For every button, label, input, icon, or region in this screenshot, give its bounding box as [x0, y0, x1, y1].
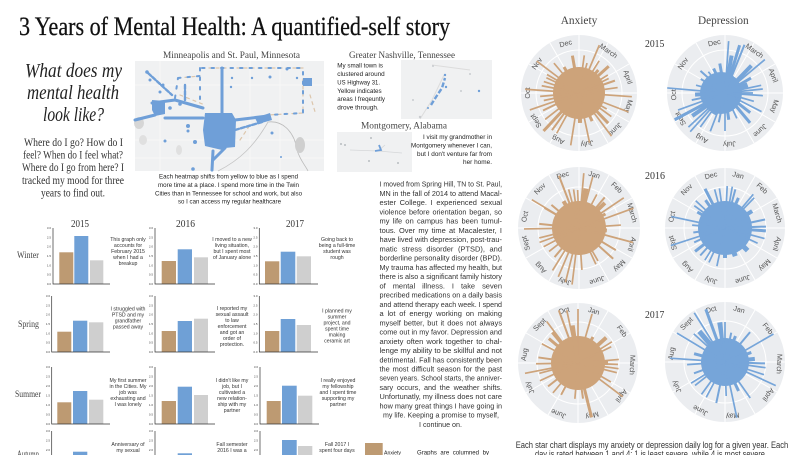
note: Summer 2017 [320, 378, 357, 408]
bar chart: Spring 2017: 3.0 [253, 294, 258, 298]
star chart: Anxiety 2016: June [588, 274, 606, 287]
bar chart: Summer 2015: 0.5 [46, 412, 50, 416]
star chart: Depression 2017: Feb [761, 321, 775, 336]
bar chart: Summer 2015 [46, 365, 110, 426]
star chart: Depression 2016: June [734, 273, 752, 286]
note: Winter 2015: This graph only [110, 237, 146, 243]
star chart: Depression 2016: Jan [731, 169, 745, 181]
personal story paragraph: ester College. I experienced sexual [380, 198, 502, 207]
bar chart: Autumn 2016: 2.0 [149, 448, 153, 452]
bar chart: Winter 2015: 2.0 [47, 245, 51, 249]
bar chart: Autumn 2016: 3.0 [149, 429, 153, 433]
heatmap caption: so I can access my regular healthcare [178, 198, 281, 206]
bar chart: Summer 2015: 0.0 [46, 422, 50, 426]
Nashville note: Yellow indicates [337, 88, 382, 95]
star chart: Depression 2016: April [771, 236, 784, 253]
star chart: Depression 2017: Jan [732, 304, 746, 315]
star chart: Depression 2017: Aug [666, 346, 677, 360]
note: Winter 2017: student was [323, 249, 351, 255]
bar chart: Spring 2016: 3.0 [149, 294, 153, 298]
star chart: Anxiety 2016: April [626, 236, 638, 253]
bar chart: Winter 2015: 0.5 [47, 273, 51, 277]
personal story paragraph: have lived with depression, post-trau- [380, 235, 502, 244]
bar chart: Winter 2017: 0.5 [253, 273, 258, 277]
star chart: Depression 2016: May [757, 257, 773, 273]
year headers for bar charts: 2015 [71, 219, 89, 230]
bar chart: Autumn 2016: 2.5 [149, 438, 153, 442]
star chart: Depression 2015: May [769, 99, 781, 114]
star chart: Depression 2017: April [760, 386, 776, 404]
bar chart: Winter 2015: 1.0 [47, 263, 51, 267]
heading: What does my mental health look like: What does my [25, 61, 122, 82]
bar chart: Summer 2016: 2.0 [149, 384, 153, 388]
star chart: Depression 2017: March [775, 354, 784, 374]
intro text: tracked my mood for three [22, 175, 124, 187]
bar chart: Spring 2017 [253, 294, 318, 354]
star chart: Anxiety 2016: Aug [533, 260, 548, 276]
star chart: Anxiety 2016: Dec [555, 169, 571, 181]
star chart column headings: Anxiety [561, 15, 598, 27]
Nashville note [337, 62, 386, 112]
Nashville note: My small town is [337, 62, 384, 70]
bar chart: Winter 2016 [149, 226, 215, 286]
bar chart: Autumn 2015 [46, 429, 87, 455]
Montgomery note: but I don't venture far from [417, 151, 492, 158]
Montgomery note: I visit my grandmother in [423, 134, 492, 141]
bar chart: Autumn 2017: 2.5 [254, 438, 258, 442]
personal story paragraph: I moved from Spring Hill, TN to St. Paul, [380, 180, 502, 189]
bar chart: Winter 2015: 2.5 [47, 235, 51, 239]
note: Spring 2015: passed away [113, 324, 144, 330]
star chart: Anxiety 2016: Sept [519, 235, 532, 252]
Nashville note: US Highway 31. [337, 80, 380, 86]
star chart: Depression 2017 [665, 302, 785, 422]
heading: What does my mental health look like [25, 61, 122, 126]
note: Winter 2017: Going back to [321, 237, 353, 243]
bar chart: Winter 2015: 3.0 [47, 226, 51, 230]
star chart explanation [516, 440, 788, 455]
year headers for bar charts: 2016 [176, 219, 195, 230]
note: Winter 2015: when I had a [113, 255, 143, 261]
star chart: Depression 2016: March [770, 202, 784, 224]
personal story paragraph: matic stress disorder (PTSD), and [380, 244, 502, 253]
note: Winter 2016: of January alone [213, 255, 251, 261]
bar chart: Autumn 2017: 3.0 [254, 429, 258, 433]
note: Spring 2017: making [329, 332, 345, 338]
personal story paragraph: there is also a significant family history [380, 272, 502, 281]
bar chart: Summer 2017: 1.0 [254, 403, 258, 407]
Montgomery note: Montgomery whenever I can, [411, 142, 492, 150]
star chart: Depression 2015: April [767, 67, 780, 84]
star chart year labels: 2016 [645, 171, 665, 182]
note: Spring 2016 [216, 306, 249, 348]
note: Autumn 2016: 2016 I was a [217, 448, 247, 454]
bar chart: Spring 2015: 3.0 [46, 294, 50, 298]
year headers for bar charts: 2017 [286, 219, 304, 230]
star chart: Anxiety 2016: March [625, 202, 639, 224]
star chart column headings [561, 15, 749, 27]
bar chart: Winter 2017: 2.5 [253, 235, 258, 239]
note: Spring 2016: order of [223, 336, 241, 342]
bar chart: Summer 2016: 3.0 [149, 365, 153, 369]
note: Winter 2017: being a full-time [319, 243, 355, 249]
bar chart: Autumn 2016 [149, 429, 192, 455]
note: Spring 2016: I reported my [217, 306, 248, 312]
map heading: Nashville: Greater Nashville, Tennessee [349, 50, 456, 61]
star chart: Anxiety 2017: July [522, 380, 536, 395]
note: Summer 2015: job was [118, 390, 137, 396]
star chart: Depression 2016: July [703, 275, 718, 287]
star chart: Anxiety 2015: July [580, 138, 594, 149]
note: Autumn 2015 [111, 442, 145, 454]
intro text: Where do I go from here? I [22, 162, 124, 174]
note: Winter 2015 [110, 237, 146, 267]
note: Spring 2015 [111, 306, 146, 330]
personal story paragraph: detrimental. Fall has consistently been [380, 355, 502, 364]
note: Winter 2016: but I spent most [214, 249, 251, 255]
note: Spring 2016: protection. [220, 342, 244, 348]
star chart: Depression 2015: Nov [675, 55, 690, 71]
heatmap: Greater Nashville [401, 60, 492, 119]
bar chart: Spring 2015 [46, 294, 110, 354]
bar chart: Winter 2016: 0.0 [149, 282, 153, 286]
note: Winter 2016: I moved to a new [212, 237, 252, 243]
personal story paragraph: myself better, but it does not always [380, 318, 502, 327]
heading: What does my mental health look like: look like? [43, 105, 104, 126]
bar chart: Spring 2015: 0.5 [46, 341, 50, 345]
bar chart: Winter 2016: 1.5 [149, 254, 153, 258]
note: Summer 2015: My first summer [110, 378, 147, 384]
note: Winter 2015: breakup [119, 261, 137, 267]
star chart: Anxiety 2017: May [584, 410, 600, 422]
personal story paragraph: borderline personality disorder (BPD). [380, 254, 502, 263]
star chart year labels: 2015 [645, 39, 664, 50]
bar chart: Summer 2015: 1.0 [46, 403, 50, 407]
bar chart: Winter 2016: 1.0 [149, 263, 153, 267]
note: Summer 2016: I didn't like my [216, 378, 249, 384]
bar chart: Winter 2016: 2.5 [149, 235, 153, 239]
personal story paragraph: my life. Keeping a promise to myself, [383, 411, 499, 420]
note: Summer 2015 [110, 378, 147, 408]
star chart: Anxiety 2015: Nov [529, 55, 544, 71]
star chart: Anxiety 2015: April [621, 69, 635, 86]
bar chart: Winter 2015: 0.0 [47, 282, 51, 286]
note: Winter 2016 [212, 237, 252, 261]
map heading: Minneapolis: Minneapolis and St. Paul, Minnesota [163, 50, 301, 61]
star chart: Depression 2015: Aug [694, 132, 709, 146]
note: Autumn 2017: spent four days [319, 448, 355, 454]
note: Spring 2017: spent time [325, 326, 349, 332]
star chart: Anxiety 2015: Dec [558, 37, 573, 49]
bar chart: Summer 2015: 1.5 [46, 394, 50, 398]
bar chart: Spring 2016: 1.0 [149, 331, 153, 335]
heatmap caption: Each heatmap shifts from yellow to blue as I spend [159, 174, 298, 180]
note: Summer 2016: new relation- [217, 396, 247, 402]
star chart: Anxiety 2015: Oct [523, 87, 532, 99]
bar chart: Summer 2017: 0.0 [254, 422, 258, 426]
bar chart: Summer 2015: 2.5 [46, 374, 50, 378]
bar chart: Spring 2017: 1.5 [253, 322, 258, 326]
bar chart: Summer 2016: 1.0 [149, 403, 153, 407]
season labels: Summer [15, 389, 41, 399]
star chart: Anxiety 2016: Nov [532, 181, 548, 196]
bar chart: Winter 2017: 3.0 [253, 226, 258, 230]
note: Autumn 2015: Anniversary of [111, 442, 145, 448]
note: Summer 2017: supporting my [322, 396, 355, 402]
bar chart: Spring 2016: 0.0 [149, 350, 153, 354]
star chart: Depression 2015: Dec [707, 37, 722, 48]
heatmap caption: more time at a place. I spend more time in the Twin [158, 182, 299, 189]
bar chart: Summer 2017: 0.5 [254, 412, 258, 416]
note: Spring 2017: I planned my [322, 308, 352, 314]
bar chart: Spring 2016: 2.0 [149, 313, 153, 317]
season labels: Spring [18, 319, 39, 329]
star chart: Anxiety 2016 [518, 167, 640, 289]
intro text: years to find out. [41, 188, 105, 200]
note: Spring 2015: PTSD and my [112, 312, 145, 318]
note: Summer 2016: job, but I [221, 384, 242, 390]
intro text: feel? When do I feel what? [23, 150, 123, 162]
star chart: Anxiety 2016: May [611, 258, 628, 274]
title: 3 Years of Mental Health: A quantified-self story [19, 12, 450, 41]
star chart: Anxiety 2017: Oct [557, 305, 570, 316]
note: Winter 2015: accounts for [114, 243, 142, 249]
personal story paragraph: come out in my favor. Depression and [380, 328, 502, 336]
star chart column headings: Depression [698, 15, 749, 27]
bar chart: Spring 2015: 0.0 [46, 350, 50, 354]
note: Spring 2016: to law [225, 318, 239, 324]
star chart: Anxiety 2015: May [623, 99, 635, 114]
star chart year labels [645, 39, 665, 321]
star chart: Depression 2017: July [669, 379, 683, 394]
note: Summer 2015: in the Cities. My [110, 384, 147, 390]
personal story paragraph: sary occurs, and the weather shifts. [380, 383, 502, 392]
bar chart: Summer 2016 [149, 365, 215, 426]
season labels: Winter [17, 250, 39, 260]
bar chart: Spring 2016: 1.5 [149, 322, 153, 326]
star chart: Depression 2015: July [722, 139, 736, 149]
star chart: Depression 2015: Sept [673, 110, 688, 127]
star chart: Depression 2016: Oct [666, 210, 677, 223]
bar chart: Autumn 2015: 3.0 [46, 429, 50, 433]
bar chart: Summer 2017: 3.0 [254, 365, 258, 369]
personal story paragraph: seven years. School starts, the anniver- [380, 374, 502, 383]
star chart: Depression 2015: Oct [669, 89, 678, 101]
bar chart: Autumn 2017: 2.0 [254, 448, 258, 452]
bar chart: Autumn 2015: 2.0 [46, 448, 50, 452]
personal story paragraph: of mental illness. I take seven [380, 281, 502, 290]
star chart: Anxiety 2017: Sept [531, 316, 548, 333]
star chart: Depression 2016: Feb [755, 181, 770, 196]
bar chart: Summer 2017: 2.0 [254, 384, 258, 388]
bar chart: Summer 2016: 0.0 [149, 422, 153, 426]
personal story paragraph: violence before orientation began, so [380, 207, 502, 216]
star chart: Anxiety 2017: Aug [519, 347, 530, 361]
bar chart: Spring 2017: 2.5 [253, 303, 258, 307]
star chart: Depression 2016: Dec [704, 169, 719, 181]
star chart: Anxiety 2015: Sept [528, 112, 544, 130]
note: Autumn 2015: my sexual [116, 448, 140, 454]
star chart: Anxiety 2016: Oct [519, 210, 530, 223]
legend [365, 443, 490, 455]
bar chart: Winter 2015: 1.5 [47, 254, 51, 258]
bar chart: Spring 2017: 2.0 [253, 313, 258, 317]
note: Summer 2016 [216, 378, 249, 414]
star chart: Anxiety 2015 [521, 35, 637, 151]
Nashville note: drove through. [337, 104, 379, 112]
star chart: Anxiety 2016: July [557, 276, 572, 288]
heatmap caption [155, 174, 302, 206]
star chart: Depression 2015 [667, 35, 783, 151]
bar chart: Spring 2017: 0.5 [253, 341, 258, 345]
note: Summer 2015: I was lonely [114, 402, 142, 408]
bar chart: Winter 2017: 0.0 [253, 282, 258, 286]
personal story paragraph: My trauma has affected my health, but [380, 263, 503, 272]
bar chart: Spring 2015: 2.0 [46, 313, 50, 317]
bar chart: Spring 2016 [149, 294, 215, 354]
bar chart: Summer 2017 [254, 365, 319, 426]
map heading: Montgomery: Montgomery, Alabama [361, 121, 448, 132]
Montgomery note [411, 134, 492, 166]
bar chart: Summer 2016: 0.5 [149, 412, 153, 416]
personal story paragraph: the most difficult season for the past [380, 364, 503, 374]
year headers for bar charts [71, 219, 304, 230]
note: Summer 2016: cultivated a [219, 390, 245, 396]
bar chart: Winter 2017: 2.0 [253, 245, 258, 249]
note: Spring 2016: sexual assault [216, 312, 249, 318]
note: Autumn 2017 [319, 442, 355, 454]
bar chart: Winter 2017: 1.5 [253, 254, 258, 258]
star chart: Anxiety 2017: April [613, 387, 629, 405]
note: Summer 2017: partner [330, 402, 346, 408]
star chart: Anxiety 2015: Aug [550, 133, 566, 147]
note: Summer 2017: my fellowship [322, 384, 354, 390]
bar chart: Spring 2017: 0.0 [253, 350, 258, 354]
note: Summer 2016: ship with my [218, 402, 247, 408]
bar chart: Summer 2015: 2.0 [46, 384, 50, 388]
star chart: Depression 2017: June [691, 403, 709, 418]
heatmap: Minneapolis and St. Paul [134, 61, 324, 171]
note: Winter 2015: February 2015 [111, 249, 145, 255]
bar chart: Autumn 2017 [254, 429, 312, 455]
note: Winter 2017 [319, 237, 355, 261]
star chart: Depression 2015: March [744, 41, 765, 60]
personal story paragraph: MN in the fall of 2014 to attend Macal- [380, 189, 502, 198]
note: Autumn 2017: Fall 2017 I [325, 442, 349, 448]
bar chart: Summer 2015: 3.0 [46, 365, 50, 369]
star chart: Depression 2017: Oct [704, 304, 717, 315]
Montgomery note: her home. [463, 159, 492, 166]
note: Autumn 2016 [216, 442, 248, 454]
personal story paragraph: tous. Over my time at Macalester, I [380, 226, 502, 235]
bar chart: Summer 2016: 1.5 [149, 394, 153, 398]
star chart: Anxiety 2016: Jan [587, 169, 601, 181]
note: Spring 2016: enforcement [218, 324, 247, 330]
personal story paragraph: lenge my ability to be skillful and not [380, 346, 503, 355]
star chart: Anxiety 2015: June [607, 121, 624, 138]
note: Winter 2016: living situation, [215, 243, 249, 249]
star chart: Depression 2017: Sept [678, 315, 695, 332]
bar chart: Summer 2017: 1.5 [254, 394, 258, 398]
star chart: Depression 2016: Sept [666, 235, 679, 251]
bar chart: Autumn 2015: 2.5 [46, 438, 50, 442]
star chart: Anxiety 2016: Feb [609, 180, 624, 195]
bar chart: Spring 2016: 0.5 [149, 341, 153, 345]
note: Spring 2015: grandfather [115, 318, 142, 324]
note: Spring 2015: I struggled with [111, 306, 146, 312]
star chart: Depression 2016: Nov [679, 181, 694, 197]
bar chart: Winter 2016: 3.0 [149, 226, 153, 230]
star chart: Depression 2017: May [725, 411, 740, 421]
star chart year labels: 2017 [645, 310, 664, 321]
bar chart: Spring 2015: 1.5 [46, 322, 50, 326]
bar chart: Spring 2015: 1.0 [46, 331, 50, 335]
heading: What does my mental health look like: mental health [27, 83, 119, 104]
bar chart: Winter 2017: 1.0 [253, 263, 258, 267]
note: Autumn 2016: Fall semester [216, 442, 248, 448]
note: Summer 2017: and I spent time [320, 390, 357, 396]
personal story paragraph: how many great things I have going in [380, 402, 502, 410]
bar chart: Summer 2017: 2.5 [254, 374, 258, 378]
note: Spring 2016: and got an [220, 330, 244, 336]
star chart: Anxiety 2017: March [628, 355, 637, 375]
star chart: Anxiety 2015: March [598, 41, 619, 60]
personal story paragraph: my life on campus has been tumul- [380, 217, 502, 226]
personal story paragraph: Unfortunatly, my illness does not care [380, 392, 502, 401]
bar chart: Spring 2015: 2.5 [46, 303, 50, 307]
personal story paragraph: I continue on. [419, 420, 462, 429]
star chart: Anxiety 2017: Jan [587, 305, 601, 317]
star chart: Anxiety 2017 [518, 303, 638, 423]
personal story paragraph [380, 180, 503, 429]
heatmap: Montgomery [337, 132, 412, 172]
note: Spring 2017 [322, 308, 352, 344]
note: Summer 2015: exhausting and [110, 396, 146, 402]
bar chart: Spring 2017: 1.0 [253, 331, 258, 335]
season labels [15, 250, 41, 455]
bar chart: Winter 2016: 2.0 [149, 245, 153, 249]
bar chart: Spring 2016: 2.5 [149, 303, 153, 307]
note: Winter 2017: rough [330, 255, 344, 261]
personal story paragraph: anxiety often work together to chal- [380, 337, 502, 346]
note: Spring 2017: summer [328, 314, 347, 320]
star chart: Depression 2016 [665, 168, 785, 288]
bar chart: Winter 2017 [253, 226, 318, 286]
bar chart: Winter 2015 [47, 226, 110, 286]
personal story paragraph: and attend therapy each week. I spend [380, 300, 502, 309]
intro text [22, 137, 124, 200]
Nashville note: areas I freqeuntly [337, 96, 386, 103]
star chart: Anxiety 2017: Feb [615, 323, 629, 339]
star chart: Depression 2016: Aug [679, 260, 695, 275]
star chart: Depression 2015: June [751, 122, 769, 139]
note: Summer 2016: partner [224, 408, 240, 414]
intro text: Where do I go? How do I [24, 137, 123, 149]
star chart: Anxiety 2017: June [550, 407, 567, 421]
bar chart: Winter 2016: 0.5 [149, 273, 153, 277]
Nashville note: clustered around [337, 71, 385, 78]
note: Spring 2017: ceramic art [324, 338, 350, 344]
bar chart: Summer 2016: 2.5 [149, 374, 153, 378]
heatmap caption: Cities than in Tennessee for school and work, but also [155, 190, 302, 198]
note: Summer 2017: I really enjoyed [321, 378, 356, 384]
personal story paragraph: precribed medications on a daily basis [380, 291, 502, 300]
note: Spring 2017: project, and [323, 320, 351, 326]
personal story paragraph: a lot of energy working on making [380, 309, 502, 318]
